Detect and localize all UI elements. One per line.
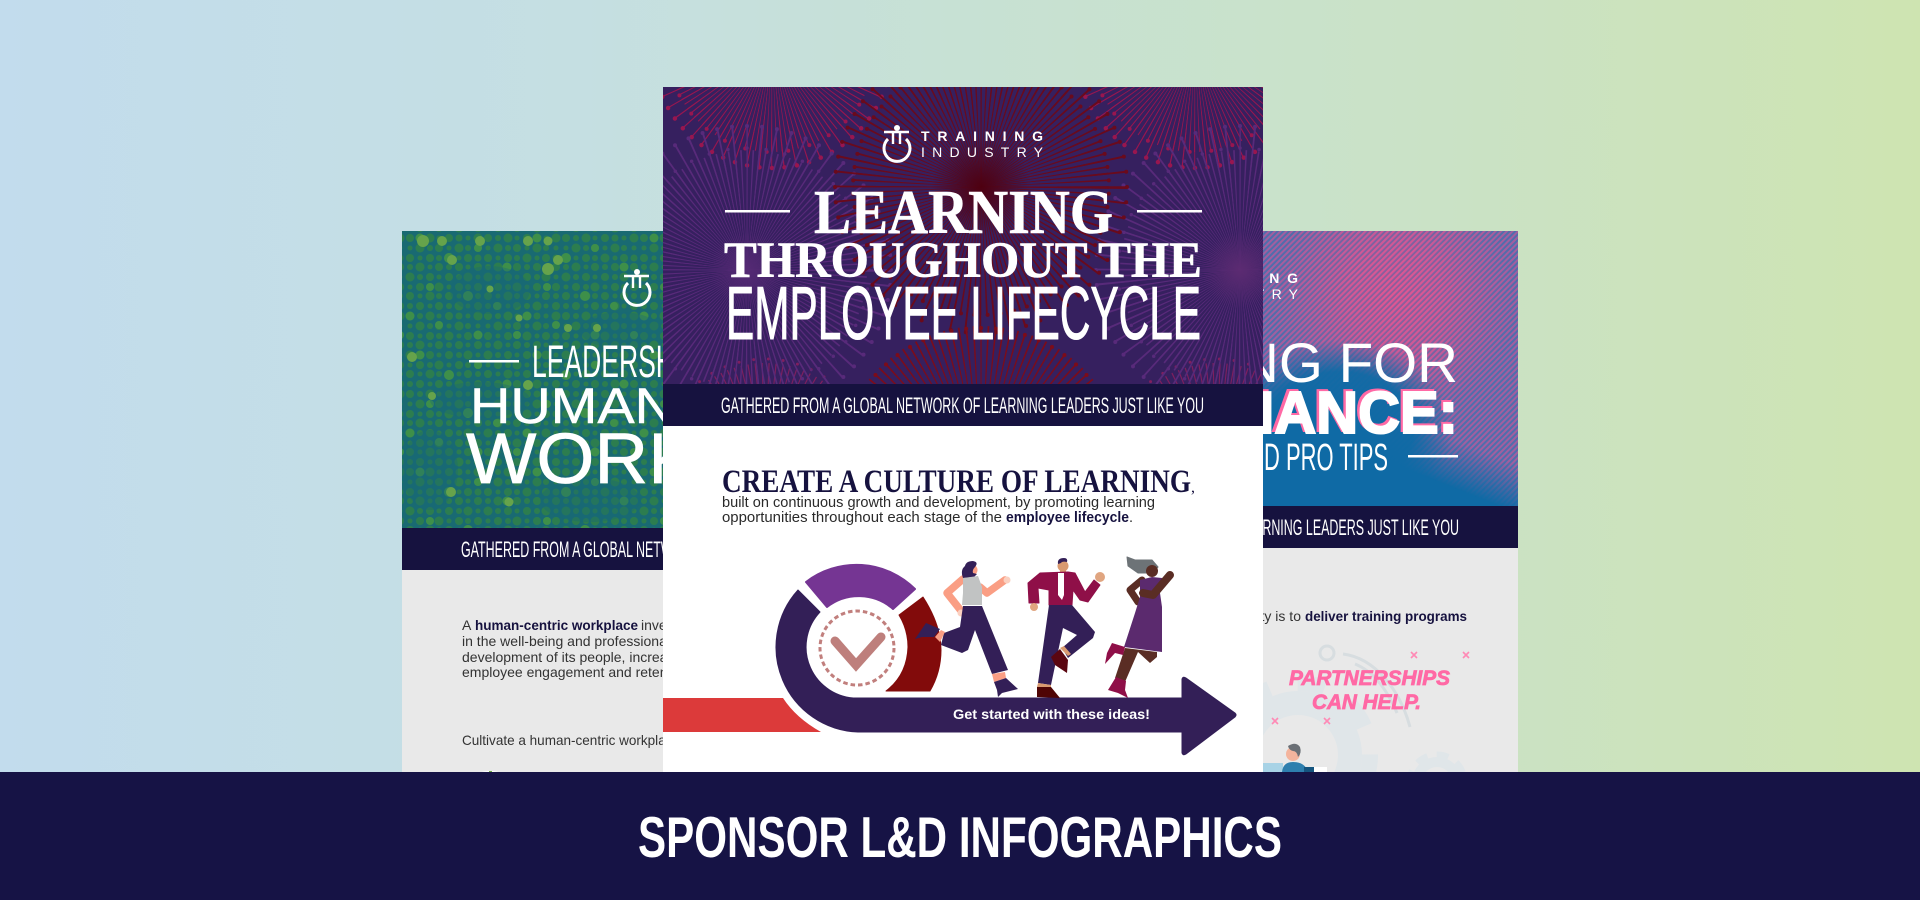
right card body: [1263, 548, 1518, 772]
right subtitle band: [1263, 506, 1518, 548]
subtitle band: GATHERED FROM A GLOBAL NETWORK OF LEARNING LEADERS JUST LIKE YOU: [721, 393, 1204, 418]
purple burst left: [663, 124, 893, 384]
left subtitle band: [402, 528, 663, 570]
gear illustration: [1263, 644, 1465, 772]
pink burst lower left: [698, 358, 826, 384]
logo wordmark: INDUSTRY: [921, 144, 1044, 160]
figure: woman in dress: [1105, 557, 1170, 698]
right logo text: INDUSTRY: [1176, 286, 1299, 302]
left subtitle band: GATHERED FROM A GLOBAL NETWORK OF LEARNING LEADERS JUST LIKE YOU: [461, 537, 944, 562]
arrow caption: Get started with these ideas!: [953, 707, 1150, 722]
title: learning: LEARNING: [814, 179, 1113, 247]
right subtitle band: GATHERED FROM A GLOBAL NETWORK OF LEARNING LEADERS JUST LIKE YOU: [976, 515, 1459, 540]
left intro text: [462, 620, 663, 748]
panel: left infographic: [402, 231, 663, 772]
section intro text: built on continuous growth and development, by promoting learning: [722, 495, 1155, 511]
left title: human: HUMAN: [470, 378, 675, 434]
callout: partnerships can help: [1288, 670, 1450, 710]
left intro text: invests: [641, 617, 685, 633]
right title: training for: NG FOR: [1238, 331, 1458, 394]
callout: partnerships can help: PARTNERSHIPS: [1289, 667, 1450, 690]
decorative pink marks: [1272, 652, 1469, 724]
subtitle band: [663, 384, 1263, 426]
footer bar: [0, 772, 1920, 900]
check mark: [835, 637, 881, 665]
panel: right infographic: [1263, 231, 1518, 772]
left header pattern: [402, 231, 663, 528]
person at laptop: [1263, 744, 1327, 772]
pink burst upper right: [1080, 87, 1263, 170]
left intro text: human-centric workplace: [475, 617, 638, 633]
right title: pro tips: D PRO TIPS: [1264, 437, 1388, 479]
left intro text: in the well-being and professional: [462, 633, 670, 649]
right header pattern: [1263, 231, 1518, 506]
right logo text: [1263, 274, 1298, 299]
center logo: [884, 126, 1044, 161]
section intro text: .: [1129, 510, 1133, 526]
right title rule: [1408, 455, 1458, 458]
lifecycle arrow illustration: [663, 565, 1236, 755]
center header firework pattern: [663, 87, 1263, 384]
figure: running woman: [915, 561, 1018, 697]
section intro text: [722, 495, 1155, 526]
section intro text: opportunities throughout each stage of the: [722, 510, 1002, 526]
center card body: [663, 87, 1263, 772]
purple segment: [806, 565, 915, 609]
pink burst lower right: [1149, 358, 1263, 384]
right intro text: [1263, 611, 1466, 624]
left illustration top: [482, 771, 498, 772]
pink burst upper left: [663, 87, 887, 170]
title: employee lifecycle: EMPLOYEE LIFECYCLE: [726, 271, 1201, 355]
dashed ring: [820, 611, 894, 685]
panel: center infographic: [663, 87, 1263, 772]
title rules: [725, 210, 1202, 212]
section intro text: employee lifecycle: [1006, 510, 1129, 526]
logo icon: [884, 126, 910, 161]
right title: performance shadow: MANCE:: [1223, 378, 1456, 444]
logo wordmark: TRAINING: [921, 128, 1043, 144]
red starting bar: [663, 698, 821, 732]
purple burst right: [1094, 124, 1263, 384]
left intro text: Cultivate a human-centric workplace: [462, 732, 680, 748]
right title: performance: MANCE:: [1226, 380, 1458, 446]
left logo icon: [624, 270, 650, 305]
figure: man with tie: [1028, 558, 1105, 698]
left title: work: WORK: [466, 420, 698, 499]
right intro text: deliver training programs: [1305, 608, 1467, 624]
dark red segment: [886, 597, 941, 691]
left card body: [402, 570, 663, 772]
left intro text: employee engagement and retention: [462, 664, 690, 680]
purple arrow with arc: [776, 590, 1236, 755]
left intro text: A: [462, 617, 472, 633]
section heading: CREATE A CULTURE OF LEARNING: [722, 464, 1191, 500]
footer heading: SPONSOR L&D INFOGRAPHICS: [638, 806, 1282, 870]
section heading: ,: [1191, 479, 1195, 496]
left intro text: development of its people, increasing: [462, 649, 693, 665]
logo wordmark: [921, 128, 1044, 160]
callout: partnerships can help: CAN HELP.: [1312, 691, 1421, 714]
left title rule: [469, 360, 519, 362]
right logo text: TRAINING: [1176, 270, 1298, 286]
right intro text: ty is to: [1261, 608, 1301, 624]
left title: leadership: LEADERSHIP: [532, 336, 700, 387]
red burst lower center: [868, 326, 1094, 384]
title: throughout the: THROUGHOUT THE: [724, 233, 1202, 289]
dark red burst center: [833, 87, 1129, 334]
